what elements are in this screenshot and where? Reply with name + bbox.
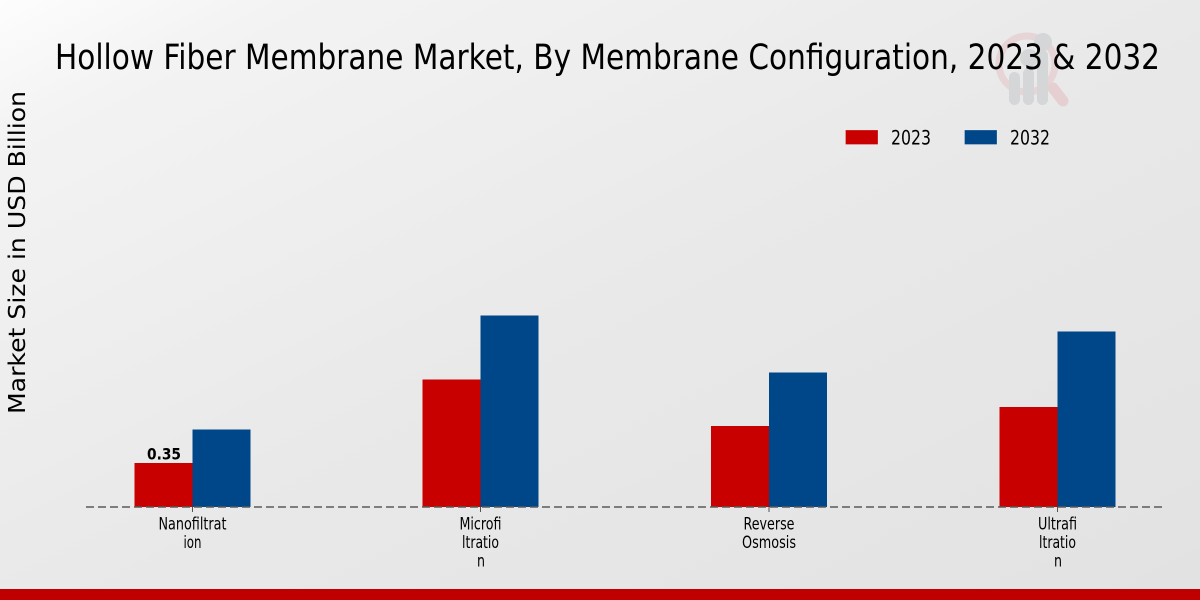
x-axis label: Reverse Osmosis: [742, 514, 796, 553]
x-axis label: Microfiltration: Microfi: [460, 514, 502, 534]
legend item: 2032: 2032: [1010, 126, 1050, 149]
x-axis label: Nanofiltration: [158, 514, 227, 553]
group: Ultrafiltration: [1000, 332, 1116, 507]
bar chart: [134, 316, 1116, 507]
x-axis label: Nanofiltration: ion: [184, 533, 202, 553]
x-axis label: Microfiltration: [460, 514, 502, 572]
group: Reverse Osmosis: [711, 372, 827, 507]
data label: 0.35: 0.35: [147, 444, 181, 463]
x-axis label: Ultrafiltration: ltratio: [1039, 533, 1076, 553]
x-axis label: Ultrafiltration: n: [1054, 552, 1062, 572]
icon: watermark logo: [999, 33, 1063, 105]
x-axis label: Microfiltration: ltratio: [462, 533, 499, 553]
legend item: 2023: [846, 126, 931, 149]
x-axis label: Ultrafiltration: Ultrafi: [1038, 514, 1077, 534]
x-axis label: Ultrafiltration: [1038, 514, 1077, 572]
group: Microfiltration: [422, 316, 538, 507]
x-axis label: Reverse Osmosis: Osmosis: [742, 533, 796, 553]
x-axis label: Reverse Osmosis: Reverse: [744, 514, 794, 534]
legend item: 2032: [964, 126, 1050, 149]
y-axis label: Market Size in USD Billion: [3, 91, 31, 414]
x-axis label: Nanofiltration: Nanofiltrat: [158, 514, 227, 534]
legend item: 2023: 2023: [891, 126, 931, 149]
group: Nanofiltration: [134, 430, 250, 507]
x-axis label: Microfiltration: n: [477, 552, 485, 572]
legend: [846, 126, 1050, 149]
footer bar: [0, 589, 1200, 600]
